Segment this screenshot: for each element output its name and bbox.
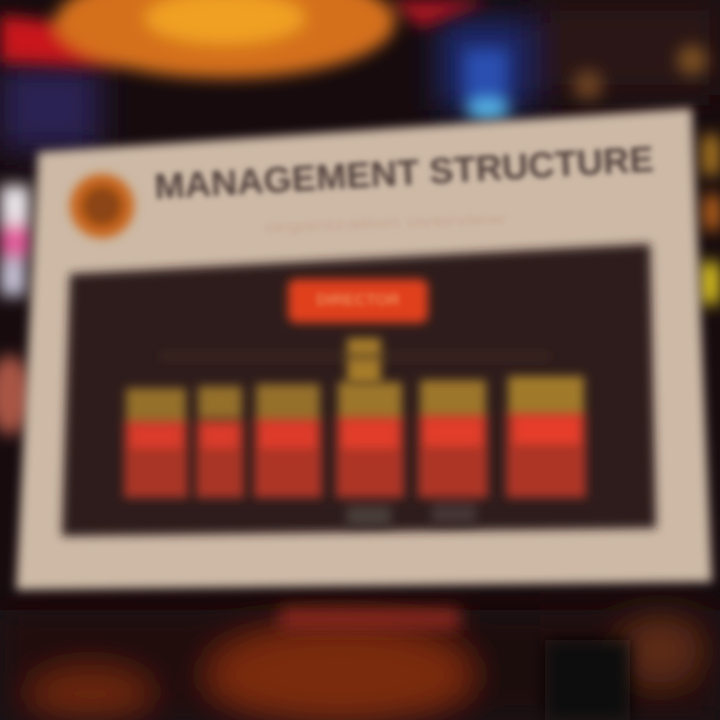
column 5 xyxy=(418,380,488,524)
icon: orange round emblem xyxy=(70,174,134,238)
top node: red box xyxy=(288,279,428,323)
column 1 xyxy=(124,388,188,498)
panel: blurred poster board: DIRECTOR xyxy=(316,292,400,309)
subtitle: organization overview xyxy=(265,211,505,236)
connector: gold stem xyxy=(160,338,550,384)
column 4 xyxy=(336,382,404,526)
column 6 xyxy=(506,376,586,498)
column 3 xyxy=(254,384,322,498)
column 2 xyxy=(196,386,244,498)
title: MANAGEMENT STRUCTURE xyxy=(153,138,655,207)
panel: dark chart area xyxy=(62,244,656,536)
